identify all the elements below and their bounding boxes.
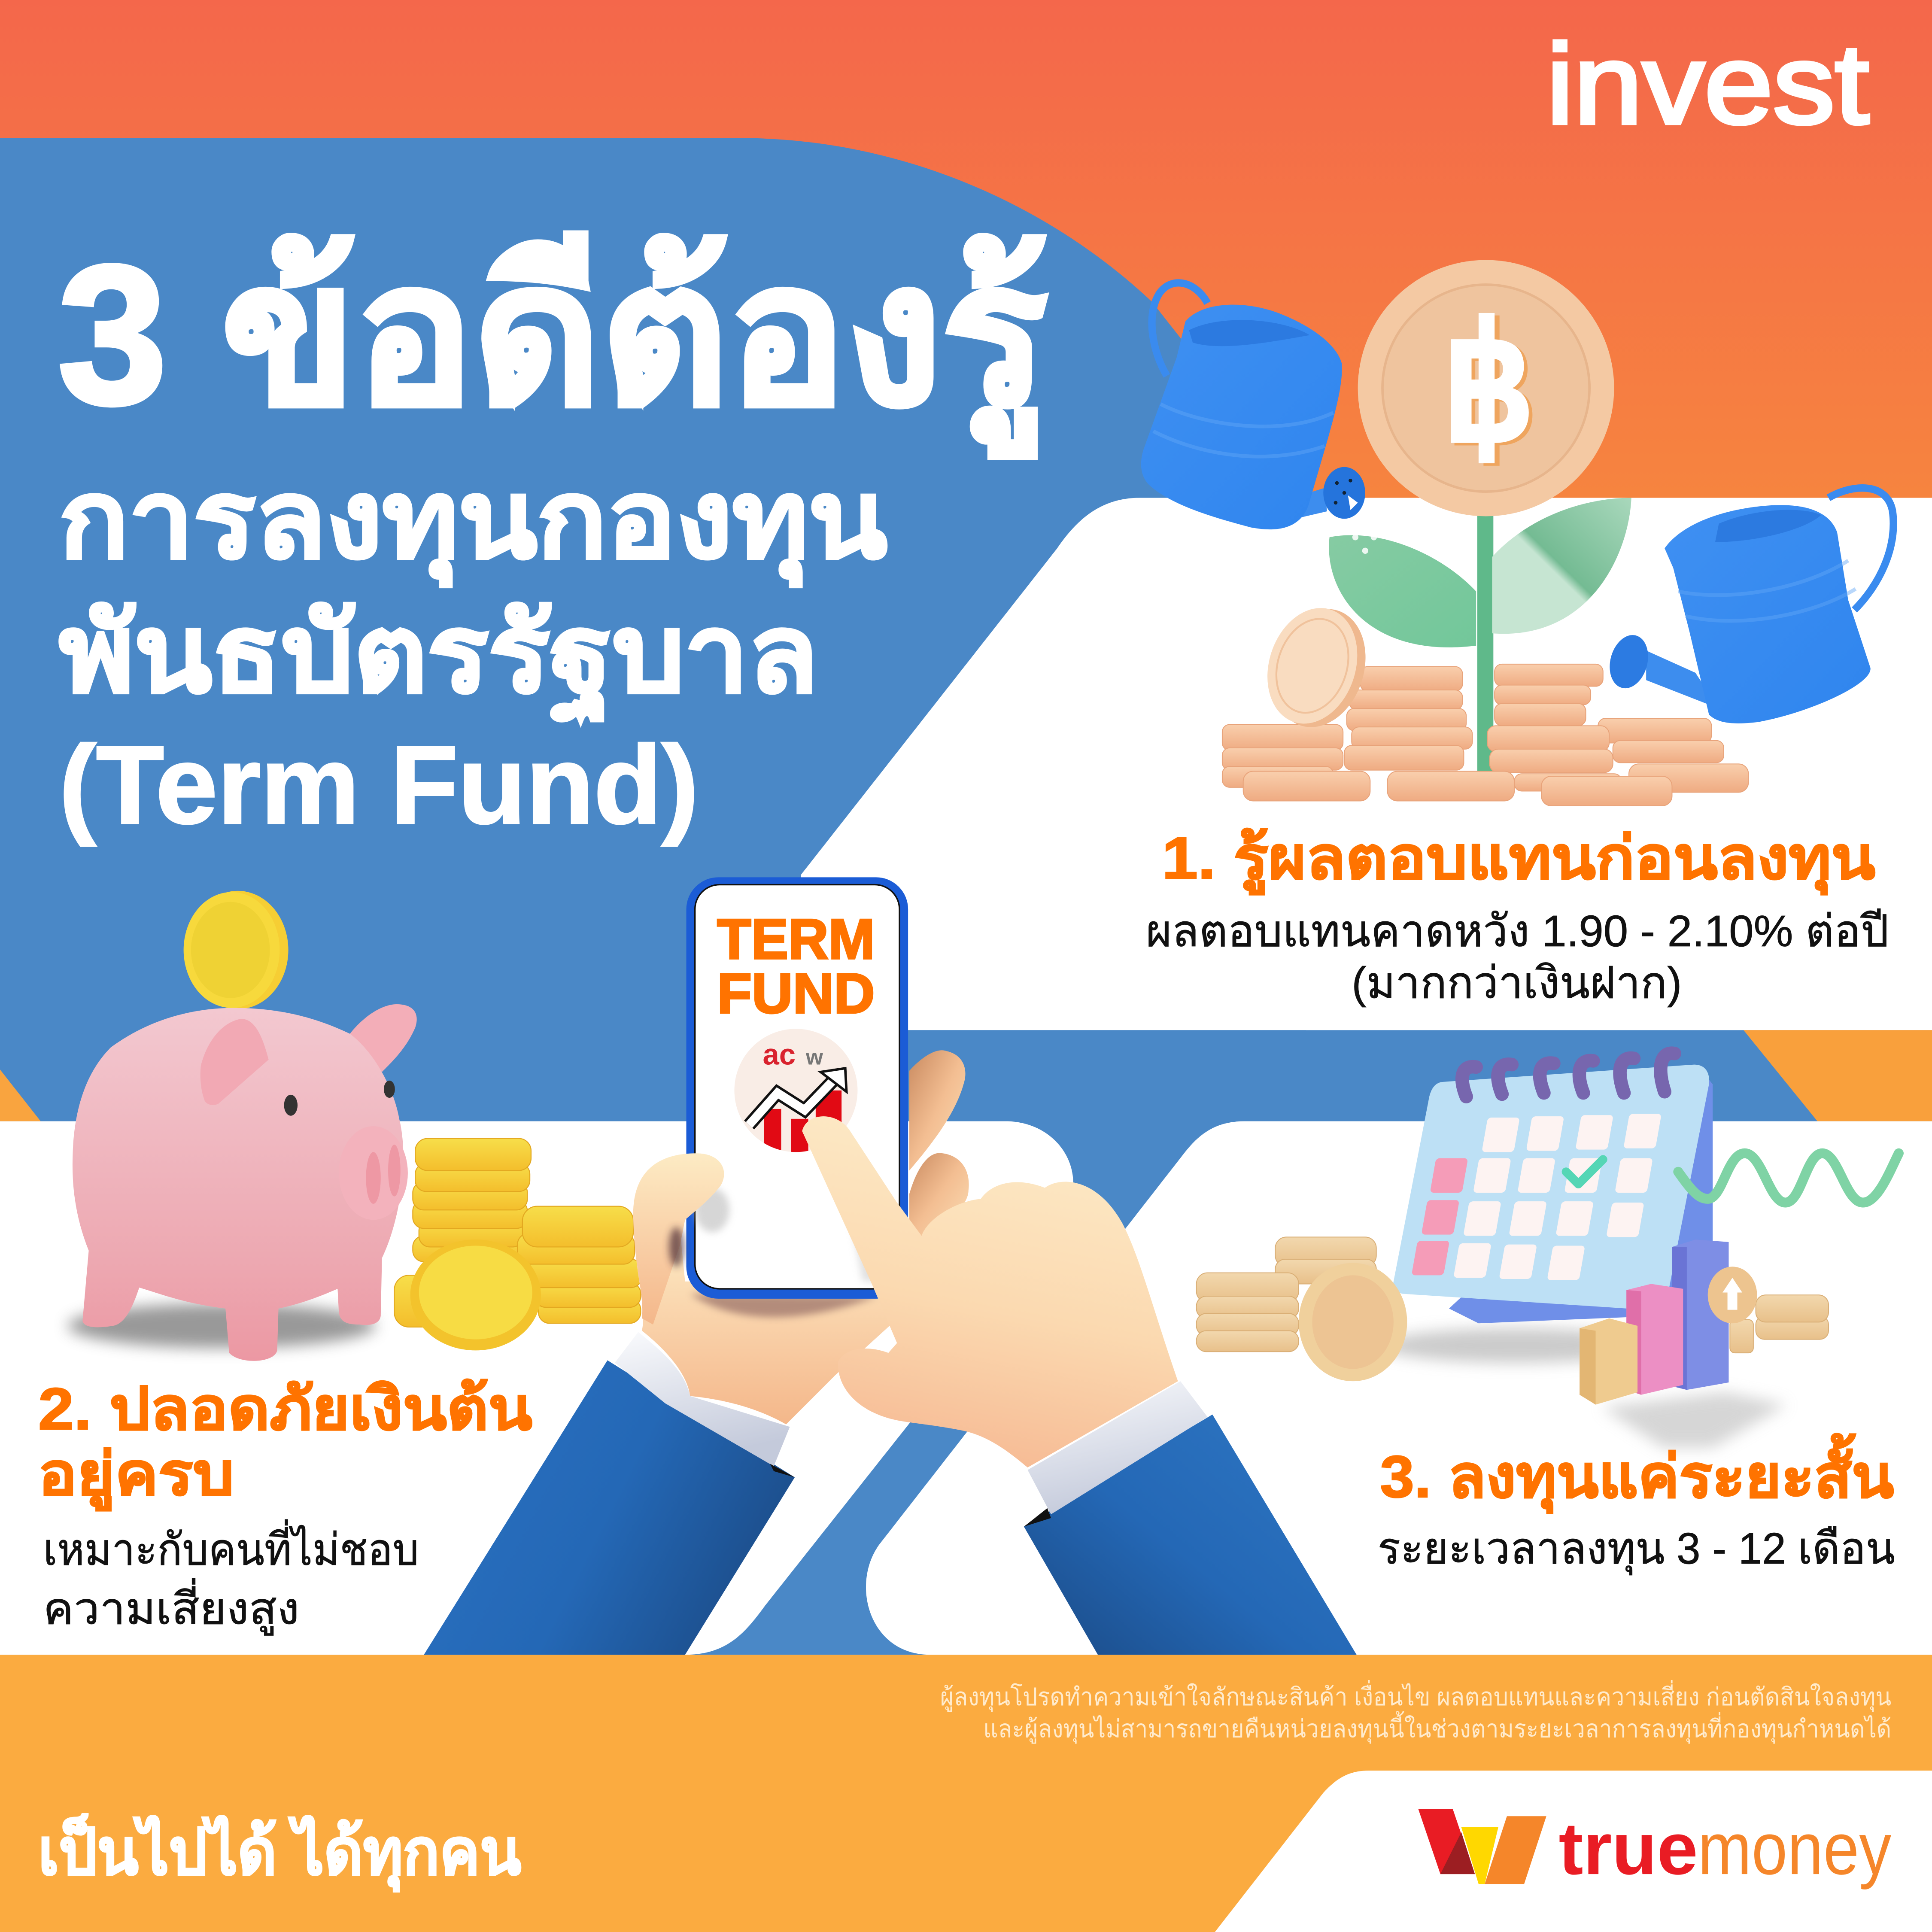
calendar rings <box>1462 1053 1674 1097</box>
thumb shadow <box>695 1188 729 1232</box>
baht symbol: B <box>1448 312 1537 474</box>
background: white panel for benefit 2 <box>0 1121 1073 1655</box>
background: white panel for benefit 3 <box>866 1121 1932 1655</box>
background: orange corner right <box>1744 1030 1932 1121</box>
green wave <box>1678 1153 1899 1203</box>
finger lower behind phone <box>909 1153 969 1236</box>
acw logo <box>734 1029 857 1158</box>
baht symbol: B <box>1444 309 1533 472</box>
disclaimer line 1: ผู้ลงทุนโปรดทำความเข้าใจลักษณะสินค้า เงื่อนไข ผลตอบแทนและความเสี่ยง ก่อนตัดสินใจลงทุน <box>940 1680 1891 1712</box>
title line 2: การลงทุนกองทุน <box>59 459 887 587</box>
pig nostril right <box>388 1145 401 1197</box>
right sleeve shadow <box>1024 1508 1051 1527</box>
standing coin <box>1253 595 1380 739</box>
background: white panel for benefit 1 <box>801 498 1932 1030</box>
background: orange corner left <box>0 1069 41 1121</box>
benefit 1 title: 1. รู้ผลตอบแทนก่อนลงทุน <box>1162 825 1875 895</box>
benefit 1 text line 1: ผลตอบแทนคาดหวัง 1.90 - 2.10% ต่อปี <box>1146 906 1889 956</box>
background: blue shape <box>0 138 1932 1655</box>
benefit 3 title: 3. ลงทุนแค่ระยะสั้น <box>1380 1433 1894 1513</box>
left thumb <box>633 1153 724 1324</box>
left watering can <box>1141 283 1365 529</box>
left palm <box>636 1232 890 1425</box>
calendar shadow <box>1380 1328 1651 1363</box>
touch shadow <box>838 1146 893 1282</box>
bar shadow <box>1602 1392 1786 1448</box>
benefit 1 text line 2: (มากกว่าเงินฝาก) <box>1352 958 1682 1008</box>
pig nostril left <box>366 1152 381 1204</box>
check mark <box>1566 1160 1603 1184</box>
benefit 2 title line 1: 2. ปลอดภัยเงินต้น <box>38 1376 532 1442</box>
pig far ear <box>350 1004 417 1072</box>
illustration: coins and plant with watering cans <box>1141 260 1893 806</box>
arrow coin <box>1708 1267 1757 1323</box>
water droplets <box>1352 534 1377 554</box>
acw logo: w <box>805 1045 823 1069</box>
benefit 2 title line 2: อยู่ครบ <box>38 1441 234 1511</box>
thumb crease shadow <box>669 1227 684 1267</box>
disclaimer <box>940 1680 1891 1744</box>
coins right <box>1730 1295 1829 1353</box>
right cuff <box>1027 1381 1207 1514</box>
gold coin stacks <box>394 1139 642 1327</box>
coin stacks front <box>1243 726 1748 806</box>
calendar back page <box>1449 1072 1713 1323</box>
acw logo: ac <box>762 1038 796 1071</box>
logo word money: money <box>1698 1807 1891 1890</box>
disclaimer line 2: และผู้ลงทุนไม่สามารถขายคืนหน่วยลงทุนนี้ในช่วงตามระยะเวลาการลงทุนที่กองทุนกำหนดได้ <box>983 1711 1891 1744</box>
logo: truemoney <box>1418 1807 1891 1890</box>
background: bottom orange band <box>0 1655 1932 1932</box>
left sleeve <box>424 1360 795 1655</box>
benefit 3 text: ระยะเวลาลงทุน 3 - 12 เดือน <box>1378 1523 1895 1576</box>
coin stacks back <box>1222 664 1724 791</box>
pig shadow <box>68 1303 376 1348</box>
standing coin tan <box>1299 1263 1407 1381</box>
background: white logo panel <box>1215 1771 1932 1932</box>
pig body <box>73 1008 403 1361</box>
shadow under phone <box>690 1294 877 1317</box>
bar chart <box>1580 1239 1728 1405</box>
logo: invest: invest <box>1546 21 1870 147</box>
phone <box>687 877 908 1299</box>
baht coin <box>1358 260 1614 516</box>
left sleeve shadow <box>770 1464 795 1477</box>
title block <box>58 225 1047 848</box>
falling gold coin <box>184 891 289 1009</box>
left leaf <box>1329 535 1476 647</box>
standing gold coin <box>410 1239 541 1350</box>
title line 1: 3 ข้อดีต้องรู้ <box>58 225 1047 459</box>
coins left <box>1197 1237 1376 1352</box>
pig snout <box>339 1126 408 1220</box>
right hand pointing <box>802 1116 1178 1467</box>
right leaf <box>1492 498 1631 634</box>
left cuff <box>615 1332 790 1466</box>
title line 3: พันธบัตรรัฐบาล <box>59 593 818 724</box>
plant stem <box>1477 505 1493 772</box>
pig eye <box>284 1095 298 1116</box>
background: top orange band <box>0 0 1932 498</box>
illustration: hands holding phone <box>424 877 1357 1655</box>
phone text fund: FUND <box>717 961 875 1025</box>
phone text term: TERM <box>717 907 875 971</box>
logo mark <box>1418 1809 1546 1884</box>
pig eye far <box>384 1081 395 1098</box>
pig near ear <box>200 1019 269 1105</box>
illustration: calendar, coins and bars <box>1197 1053 1899 1448</box>
benefit 2 text line 2: ความเสี่ยงสูง <box>43 1578 299 1636</box>
right watering can <box>1604 488 1893 723</box>
heading: benefit 3 <box>1378 1433 1895 1576</box>
slogan: เป็นไปได้ ได้ทุกคน <box>38 1814 521 1892</box>
heading: benefit 2 <box>38 1376 532 1636</box>
finger upper behind phone <box>909 1050 965 1170</box>
illustration: piggy bank and gold coins <box>68 891 642 1361</box>
calendar cells <box>1412 1114 1662 1280</box>
benefit 2 text line 1: เหมาะกับคนที่ไม่ชอบ <box>43 1519 419 1574</box>
title line 4: (Term Fund) <box>59 723 699 848</box>
right sleeve <box>1024 1415 1357 1655</box>
heading: benefit 1 <box>1146 825 1889 1008</box>
logo word true: true <box>1558 1807 1698 1890</box>
calendar body <box>1393 1065 1709 1311</box>
